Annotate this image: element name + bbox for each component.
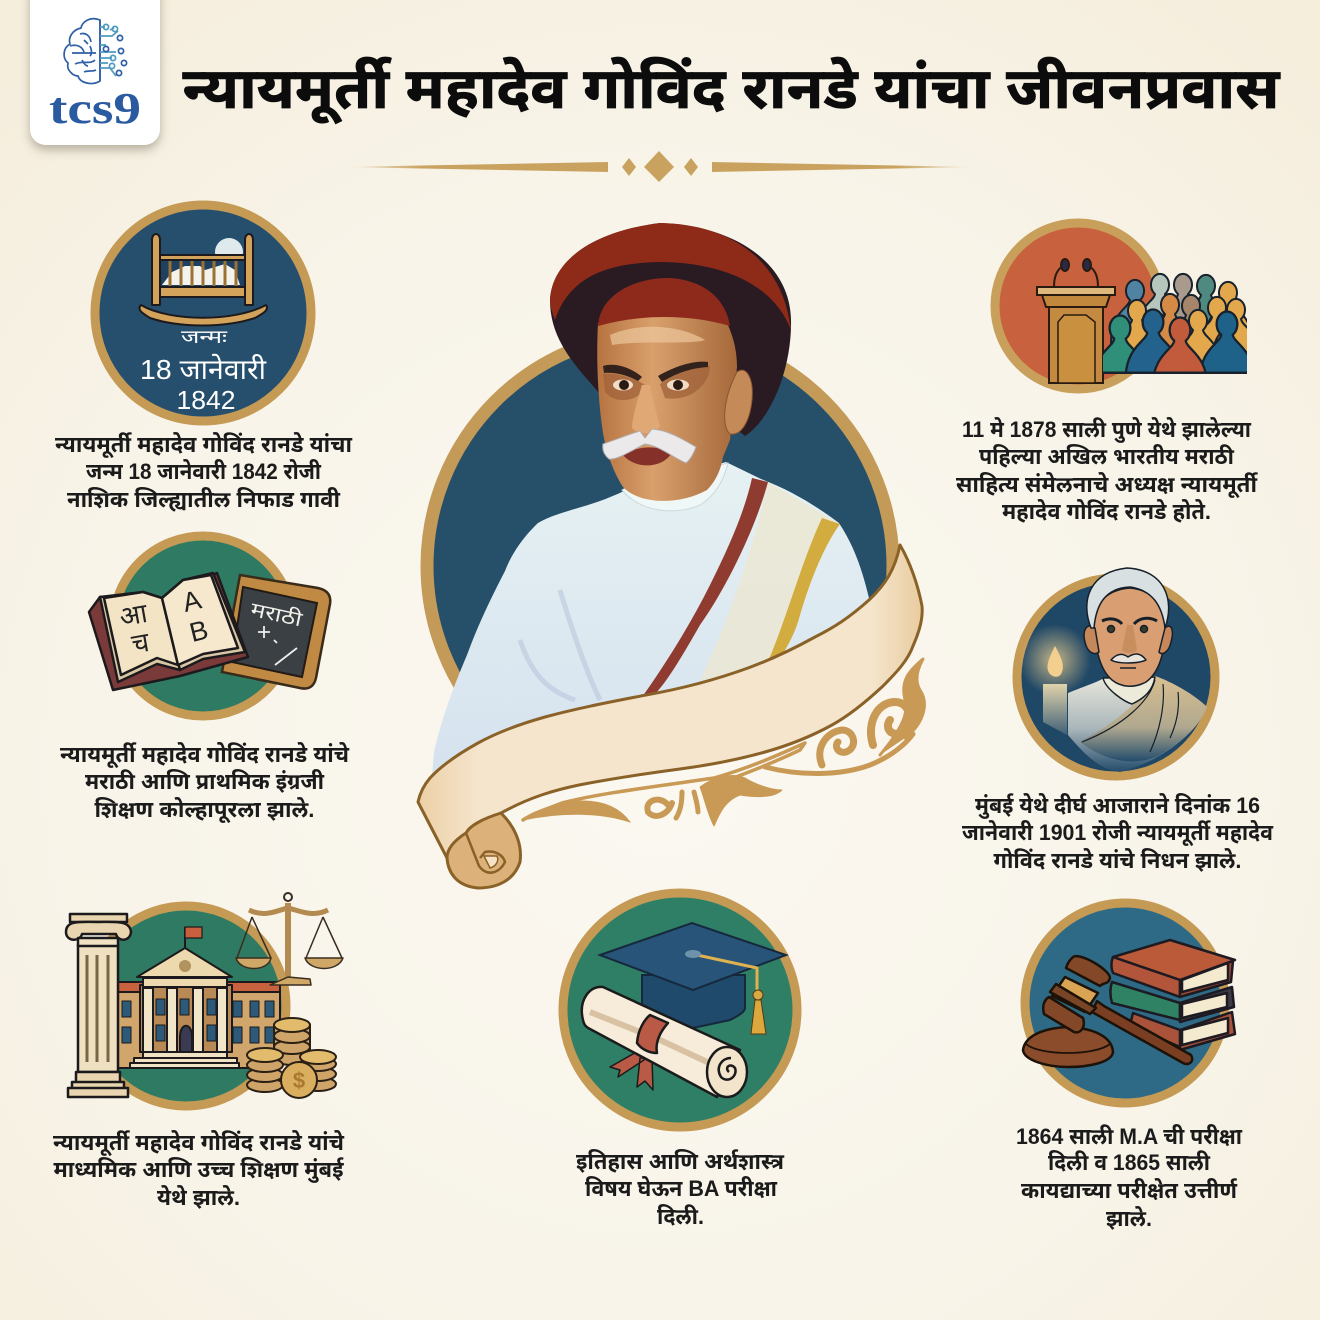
panel: death [962, 568, 1274, 873]
logo card [30, 0, 160, 145]
icon: candle [1019, 624, 1091, 735]
caption: secondary and higher education [53, 1130, 345, 1210]
caption: conference [956, 417, 1259, 524]
caption: death: जानेवारी 1901 रोजी न्यायमूर्ती महादेव [962, 820, 1274, 847]
caption: BA degree: विषय घेऊन BA परीक्षा [585, 1176, 778, 1201]
lips [623, 447, 671, 465]
medallion: death [1017, 578, 1215, 776]
panel: central portrait [418, 223, 924, 888]
caption: BA degree [576, 1149, 785, 1229]
caption: death: मुंबई येथे दीर्घ आजाराने दिनांक 16 [975, 793, 1260, 819]
birth date label: जन्मः [181, 327, 227, 347]
icon: open book [89, 573, 248, 690]
icon: university building [118, 927, 280, 1068]
birth date label: 1842 [176, 385, 236, 415]
birth date label [140, 327, 267, 415]
panel: law degree [1016, 903, 1243, 1231]
icon: slate [222, 575, 330, 689]
icon: open book: आ [117, 598, 150, 632]
portrait figure [432, 223, 869, 774]
panel: BA degree [563, 893, 797, 1229]
medallion: law [1025, 903, 1225, 1103]
caption: birth: जन्म 18 जानेवारी 1842 रोजी [86, 459, 321, 484]
caption: birth: नाशिक जिल्ह्यातील निफाड गावी [67, 487, 341, 512]
eye shadows [603, 366, 710, 400]
icon: brain circuit [64, 19, 127, 83]
icon: scales of justice [236, 893, 343, 985]
icon: cradle [139, 234, 267, 326]
caption: birth: न्यायमूर्ती महादेव गोविंद रानडे यांचा [55, 432, 353, 459]
caption: primary education: मराठी आणि प्राथमिक इंग्रजी [85, 769, 325, 794]
panel: birth [55, 205, 353, 512]
logo wordmark: tcs9 [49, 84, 141, 133]
caption: law degree: कायद्याच्या परीक्षेत उत्तीर्ण [1021, 1178, 1238, 1203]
icon: column [66, 914, 131, 1097]
ear [725, 370, 752, 434]
panel: primary education [60, 536, 350, 824]
title: न्यायमूर्ती महादेव गोविंद रानडे यांचा जीवनप्रवास [182, 56, 1280, 125]
caption: BA degree: दिली. [657, 1204, 704, 1229]
icon: elder portrait [1068, 568, 1207, 772]
caption: law degree: दिली व 1865 साली [1048, 1150, 1211, 1175]
medallion: graduation [563, 893, 797, 1127]
caption: conference: पहिल्या अखिल भारतीय मराठी [979, 444, 1235, 469]
icon: stack of coins: $ [293, 1068, 305, 1093]
medallion: education [113, 536, 293, 716]
turban underside [550, 223, 791, 436]
caption: secondary and higher education: न्यायमूर्ती महादेव गोविंद रानडे यांचे [53, 1130, 345, 1157]
icon: graduation cap [600, 923, 786, 1034]
turban crown [550, 223, 791, 330]
medallion: conference [995, 223, 1161, 389]
nose [632, 385, 660, 433]
caption: law degree: 1864 साली M.A ची परीक्षा [1016, 1124, 1243, 1149]
caption: death: गोविंद रानडे यांचे निधन झाले. [994, 848, 1242, 873]
icon: podium [1037, 259, 1115, 383]
caption: secondary and higher education: माध्यमिक आणि उच्च शिक्षण मुंबई [54, 1157, 345, 1183]
gold flourish [523, 659, 924, 826]
brows [603, 362, 708, 382]
medallion ring [420, 347, 898, 688]
caption: law degree: झाले. [1106, 1206, 1152, 1231]
face [597, 315, 737, 501]
portrait medallion and figure [427, 223, 900, 800]
medallion: university [86, 906, 286, 1106]
caption: primary education: शिक्षण कोल्हापूरला झाले. [94, 797, 314, 824]
moustache [603, 429, 696, 463]
icon: stack of coins [247, 1018, 336, 1098]
icon: diploma scroll [582, 987, 747, 1097]
icon: law books [1110, 940, 1235, 1050]
caption: conference: 11 मे 1878 साली पुणे येथे झालेल्या [962, 417, 1252, 443]
panel: secondary and higher education [53, 893, 345, 1210]
caption: law degree [1016, 1124, 1243, 1231]
birth date label: 18 जानेवारी [140, 353, 267, 385]
icon: open book: B [186, 615, 211, 648]
caption: primary education: न्यायमूर्ती महादेव गोविंद रानडे यांचे [60, 742, 350, 769]
caption: secondary and higher education: येथे झाले. [157, 1185, 240, 1210]
caption: death [962, 793, 1274, 873]
caption: birth [55, 432, 353, 512]
icon: gavel [1023, 956, 1192, 1067]
panel: literary conference [956, 223, 1260, 524]
caption: primary education [60, 742, 350, 824]
scroll ribbon [418, 545, 922, 858]
caption: conference: साहित्य संमेलनाचे अध्यक्ष न्यायमूर्ती [956, 472, 1259, 499]
icon: open book: A [179, 585, 204, 618]
icon: open book: च [129, 627, 152, 659]
medallion: birth [95, 205, 311, 421]
scroll end roll [447, 813, 520, 888]
caption: BA degree: इतिहास आणि अर्थशास्त्र [576, 1149, 785, 1174]
caption: conference: महादेव गोविंद रानडे होते. [1002, 499, 1211, 524]
icon: slate: मराठी [249, 598, 305, 632]
icon: audience [1103, 272, 1247, 374]
title divider ornament [343, 151, 977, 182]
